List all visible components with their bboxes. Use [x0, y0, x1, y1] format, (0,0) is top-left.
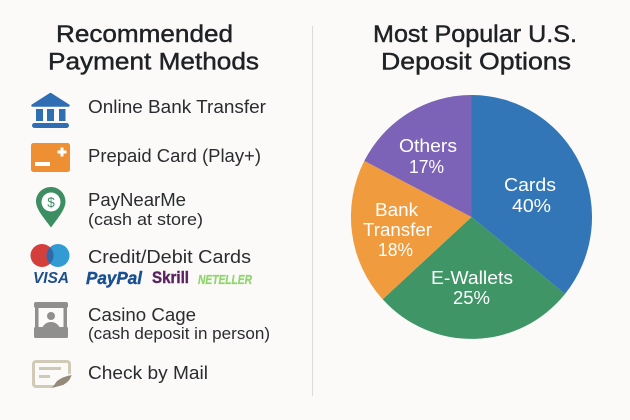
- pie labels: 25%: [453, 288, 490, 308]
- heading: most popular deposit options: [373, 21, 577, 76]
- icon: card circles and visa: VISA: [33, 270, 69, 287]
- pie labels: Transfer: [363, 220, 432, 240]
- heading: most popular deposit options: Most Popular U.S.: [373, 21, 577, 48]
- pie chart: [351, 95, 592, 339]
- logos: paypal skrill neteller: Skrill: [152, 269, 189, 287]
- slice: cards 40%: [472, 95, 592, 294]
- pie labels: Cards: [504, 175, 556, 195]
- pie labels: E-Wallets: [431, 268, 513, 288]
- pie labels: Bank: [375, 200, 419, 220]
- heading: recommended payment methods: Payment Methods: [48, 48, 259, 76]
- icon: prepaid card: [31, 143, 70, 172]
- pie labels: 40%: [512, 196, 551, 216]
- label: casino cage: (cash deposit in person): [88, 324, 270, 343]
- label: casino cage: Casino Cage: [88, 305, 196, 325]
- icon: bank: [32, 94, 69, 128]
- pie labels: 18%: [378, 240, 413, 260]
- label: paynearme: [88, 190, 203, 229]
- slice: e-wallets 25%: [383, 217, 565, 339]
- icon: location pin with dollar: [36, 187, 66, 228]
- label: paynearme: (cash at store): [88, 210, 203, 229]
- label: credit debit cards: Credit/Debit Cards: [88, 247, 251, 267]
- heading: most popular deposit options: Deposit Options: [381, 48, 571, 76]
- pie labels: 17%: [409, 157, 444, 177]
- logos: paypal skrill neteller: PayPal: [86, 268, 143, 288]
- label: casino cage: [88, 305, 270, 343]
- pie labels: Others: [399, 136, 457, 156]
- label: check by mail: Check by Mail: [88, 363, 208, 383]
- label: prepaid card: Prepaid Card (Play+): [88, 146, 261, 166]
- logos: paypal skrill neteller: NETELLER: [198, 272, 252, 287]
- icon: location pin with dollar: $: [47, 195, 55, 210]
- logos: paypal skrill neteller: [86, 268, 252, 288]
- label: paynearme: PayNearMe: [88, 190, 186, 210]
- icon: casino cage: [34, 302, 68, 338]
- slice: bank transfer 18%: [351, 161, 472, 299]
- icon: check with pen: [34, 362, 72, 390]
- heading: recommended payment methods: Recommended: [56, 21, 233, 48]
- label: online bank transfer: Online Bank Transfer: [88, 97, 266, 117]
- pie labels: [363, 136, 556, 308]
- icon: card circles and visa: [30, 244, 70, 287]
- heading: recommended payment methods: [48, 21, 259, 76]
- slice: others 17%: [364, 95, 472, 217]
